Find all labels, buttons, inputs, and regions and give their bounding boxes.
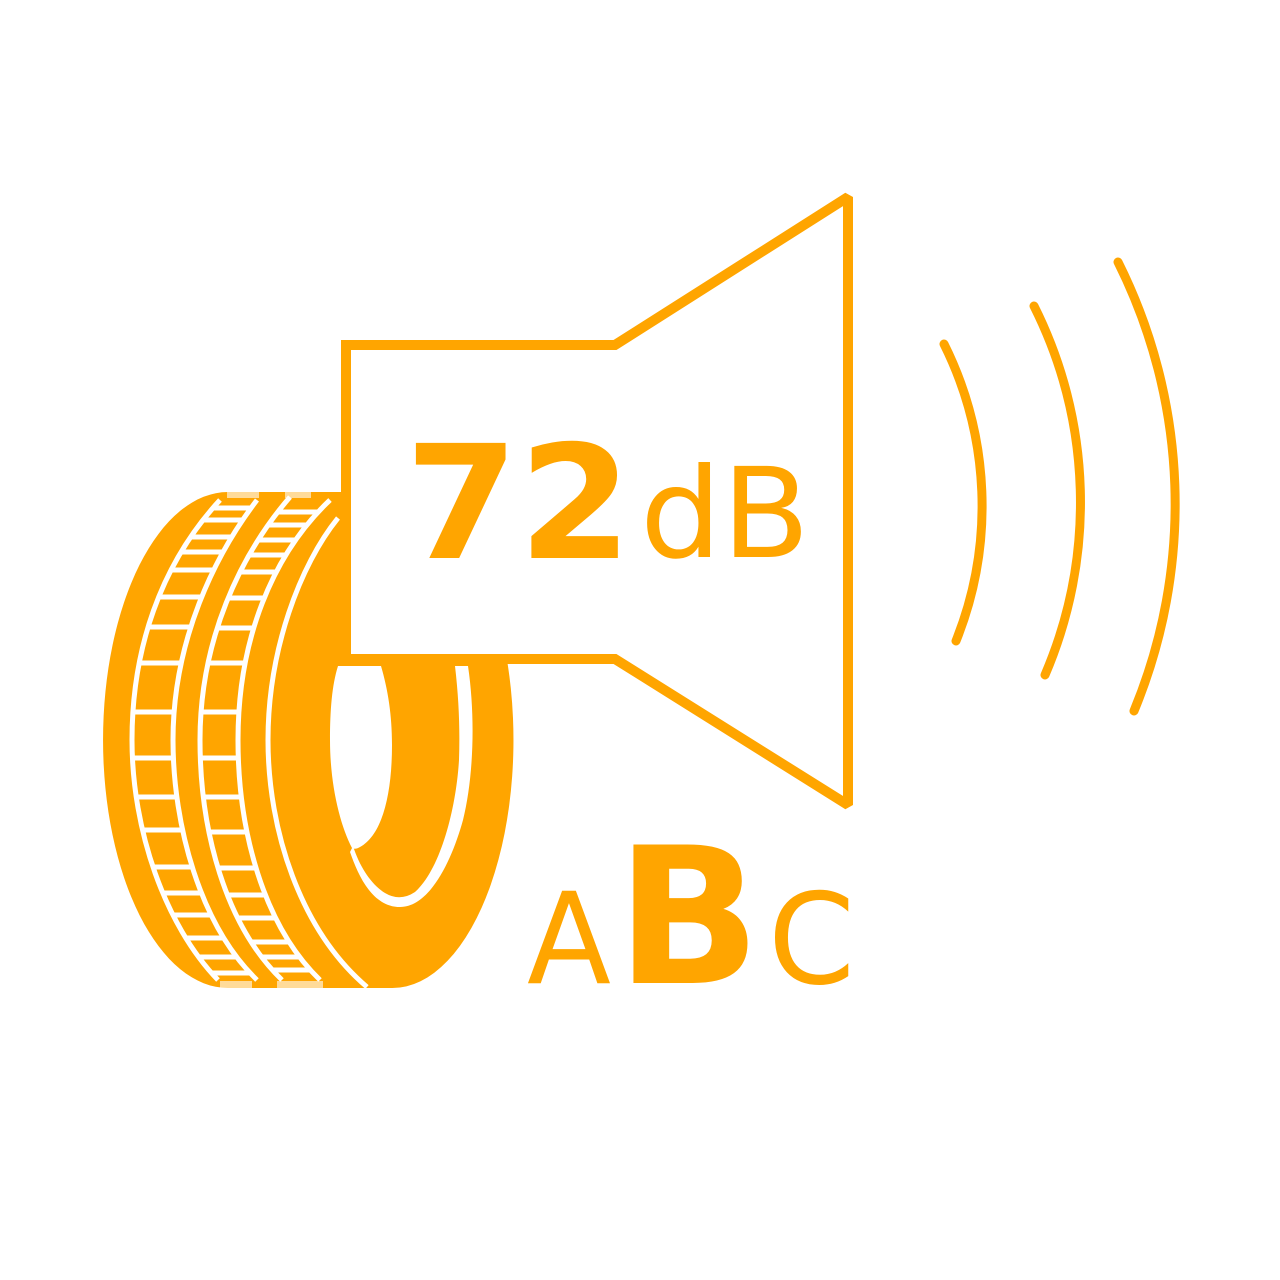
- tyre body: [103, 492, 513, 988]
- noise class: ABC: [527, 807, 855, 1028]
- icon: sound waves: [944, 262, 1175, 711]
- icon: tyre: [100, 490, 513, 989]
- noise class: ABC: B: [616, 807, 761, 1028]
- tyre noise label infographic: [103, 192, 1180, 988]
- tread blocks: inner row: [202, 510, 317, 972]
- noise class: ABC: A: [527, 865, 611, 1013]
- noise unit: dB: dB: [640, 442, 810, 587]
- tread grooves: [132, 497, 367, 987]
- tread blocks: outer row: [134, 506, 250, 976]
- tyre hole: [330, 666, 392, 849]
- noise value: 72: 72: [405, 412, 632, 596]
- rim highlight: [350, 666, 473, 907]
- icon: loudspeaker: [346, 197, 848, 805]
- tread edge fade: [220, 490, 323, 989]
- noise class: ABC: C: [768, 866, 855, 1013]
